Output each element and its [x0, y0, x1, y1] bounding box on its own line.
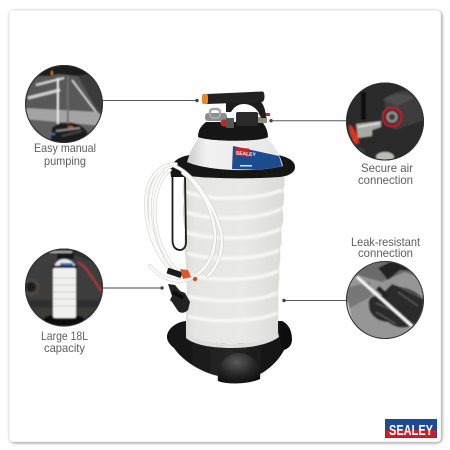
pump body [183, 176, 285, 348]
logo: SEALEY [385, 419, 437, 439]
pump handle [202, 91, 266, 118]
label: blue sticker [232, 146, 282, 170]
caption: large 18L capacity: Large 18L [41, 329, 88, 343]
caption: secure air connection [358, 161, 413, 187]
caption: large 18L capacity [41, 329, 88, 355]
leader line 1 [102, 99, 199, 102]
caption: secure air connection: connection [358, 173, 413, 187]
hose connector and drain valve [166, 268, 197, 313]
callout: leak-resistant connection [282, 235, 424, 339]
product: fluid extractor pump [146, 91, 295, 383]
bracket: black hose hanger [172, 176, 186, 250]
caption: leak-resistant connection: connection [358, 246, 413, 260]
callout: easy manual pumping [25, 65, 199, 168]
hoses [146, 164, 222, 281]
photo: pumping in engine bay [25, 65, 103, 145]
caption: easy manual pumping: Easy manual [34, 141, 96, 155]
pump lid [198, 122, 268, 141]
caption: leak-resistant connection: Leak-resistant [351, 235, 421, 249]
photo: air connector [346, 82, 424, 165]
caption: easy manual pumping: pumping [44, 154, 86, 168]
caption: easy manual pumping [34, 141, 96, 168]
leader line 4 [282, 299, 347, 302]
pump dome [187, 137, 283, 170]
photo: gloved hands on hose [346, 261, 424, 339]
leader line 2 [269, 119, 347, 122]
caption: large 18L capacity: capacity [44, 341, 85, 355]
caption: secure air connection: Secure air [361, 161, 413, 175]
leader line 3 [103, 286, 164, 290]
pump base [167, 321, 292, 383]
callout: large 18L capacity [22, 248, 164, 355]
label: blue sticker: SEALEY [236, 150, 257, 158]
photo: pump beside car [22, 248, 103, 328]
pump valves [205, 109, 270, 128]
logo: SEALEY: SEALEY [389, 422, 433, 439]
caption: leak-resistant connection [351, 235, 421, 260]
pump collar rim [170, 155, 295, 178]
callout: secure air connection [269, 82, 424, 187]
